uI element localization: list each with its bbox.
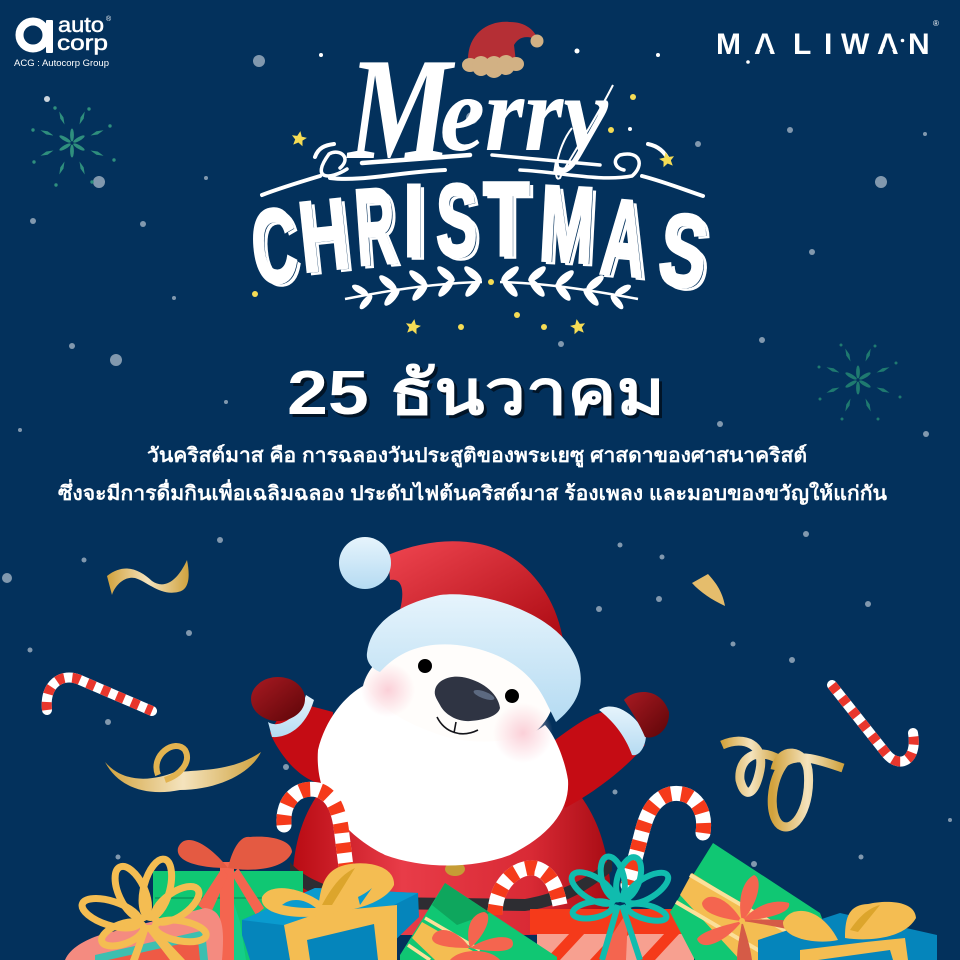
santa bbox=[251, 537, 669, 935]
gift: green tilted centre bbox=[400, 883, 557, 960]
ribbon: top left bbox=[107, 560, 189, 595]
santa beard bbox=[318, 685, 568, 866]
candy cane: centre left bbox=[284, 789, 347, 875]
title: CHRISTMAS: T bbox=[487, 164, 533, 281]
santa pompom bbox=[339, 537, 391, 589]
santa buckle bbox=[445, 862, 465, 876]
title: CHRISTMAS: S bbox=[440, 167, 481, 282]
gift: green back left bbox=[153, 837, 303, 960]
title: CHRISTMAS: M bbox=[541, 165, 601, 289]
description text: ซึ่งจะมีการดื่มกินเพื่อเฉลิมฉลอง ประดับไฟต้นคริสต์มาส ร้องเพลง และมอบของขวัญให้แก่กัน bbox=[58, 478, 887, 505]
icon: small santa hat on title bbox=[462, 22, 544, 78]
santa left cuff bbox=[268, 695, 314, 737]
title: CHRISTMAS: T bbox=[484, 163, 531, 279]
santa right glove bbox=[624, 692, 669, 738]
logo: autocorp: auto bbox=[58, 14, 104, 37]
santa nose bbox=[435, 677, 500, 721]
santa right cuff bbox=[599, 706, 646, 755]
logo: Maliwan: MALIWAN bbox=[716, 28, 930, 61]
title: CHRISTMAS: M bbox=[537, 162, 597, 286]
description text bbox=[58, 444, 887, 505]
heading: date: 25 ธันวาคม bbox=[287, 359, 665, 428]
santa fur hat band bbox=[367, 594, 581, 722]
title: CHRISTMAS: S bbox=[436, 164, 477, 279]
title: CHRISTMAS: A bbox=[598, 177, 652, 302]
ribbon: middle left bbox=[105, 746, 261, 792]
santa eyes bbox=[418, 659, 519, 703]
logo: autocorp: corp bbox=[57, 32, 108, 55]
title: CHRISTMAS: S bbox=[438, 165, 479, 281]
heading: date: 25 ธันวาคม bbox=[290, 362, 668, 431]
title: CHRISTMAS: I bbox=[403, 164, 425, 279]
candy cane: top right bbox=[832, 685, 914, 762]
santa mouth bbox=[437, 717, 478, 734]
title: CHRISTMAS: S bbox=[655, 192, 715, 312]
gift: red striped box with teal bow bbox=[530, 854, 702, 960]
title: CHRISTMAS: S bbox=[653, 190, 714, 311]
logo: autocorp bbox=[14, 14, 112, 68]
gift: pink box with yellow bow bbox=[65, 856, 223, 960]
firework left bbox=[31, 106, 116, 187]
santa face bbox=[362, 633, 554, 757]
title: Merry: erry bbox=[440, 55, 609, 174]
title: CHRISTMAS: R bbox=[355, 168, 403, 292]
title: CHRISTMAS: C bbox=[251, 190, 306, 310]
title: CHRISTMAS: H bbox=[298, 181, 358, 297]
santa cheeks bbox=[361, 663, 553, 763]
ribbon: curls right bbox=[722, 741, 843, 827]
santa nose highlight bbox=[472, 688, 496, 702]
logo: autocorp: ® bbox=[106, 15, 112, 23]
title: CHRISTMAS: C bbox=[247, 187, 302, 307]
description text: วันคริสต์มาส คือ การฉลองวันประสูติของพระเยซู ศาสดาของศาสนาคริสต์ bbox=[147, 444, 807, 469]
title: CHRISTMAS: T bbox=[483, 161, 529, 278]
title: CHRISTMAS: A bbox=[601, 179, 655, 303]
gift: green tilted right bbox=[670, 843, 838, 960]
candy cane: top left bbox=[47, 678, 152, 711]
gift: blue box right bbox=[758, 902, 937, 960]
title: CHRISTMAS: I bbox=[404, 165, 426, 280]
gift: blue box with yellow bow bbox=[242, 863, 419, 960]
title: CHRISTMAS: R bbox=[353, 167, 401, 290]
title: CHRISTMAS: I bbox=[407, 167, 429, 282]
santa left glove bbox=[251, 677, 305, 721]
santa body bbox=[290, 780, 610, 935]
title flourishes bbox=[262, 144, 703, 196]
title: Merry: M bbox=[346, 28, 455, 190]
title: CHRISTMAS: H bbox=[295, 180, 356, 296]
laurel branches bbox=[345, 264, 638, 311]
title: CHRISTMAS: R bbox=[351, 165, 399, 289]
logo: autocorp: ACG : Autocorp Group bbox=[14, 57, 109, 68]
title: Merry bbox=[346, 28, 613, 190]
santa left arm bbox=[270, 700, 333, 785]
firework right bbox=[818, 344, 902, 420]
title: CHRISTMAS: S bbox=[657, 193, 718, 314]
candy cane: centre right bbox=[628, 793, 704, 885]
gold dots and stars bbox=[252, 94, 676, 335]
santa right arm bbox=[555, 712, 645, 808]
title: CHRISTMAS: H bbox=[294, 178, 354, 294]
title: CHRISTMAS: M bbox=[538, 163, 599, 287]
santa belt bbox=[290, 857, 612, 911]
logo: Maliwan: ® bbox=[933, 19, 939, 28]
title: CHRISTMAS: A bbox=[597, 176, 651, 300]
santa hat bbox=[388, 541, 563, 640]
ribbon: top right bbox=[692, 574, 725, 606]
candy cane: small bbox=[495, 868, 560, 915]
title: CHRISTMAS bbox=[247, 161, 718, 314]
title: CHRISTMAS: C bbox=[248, 188, 303, 309]
